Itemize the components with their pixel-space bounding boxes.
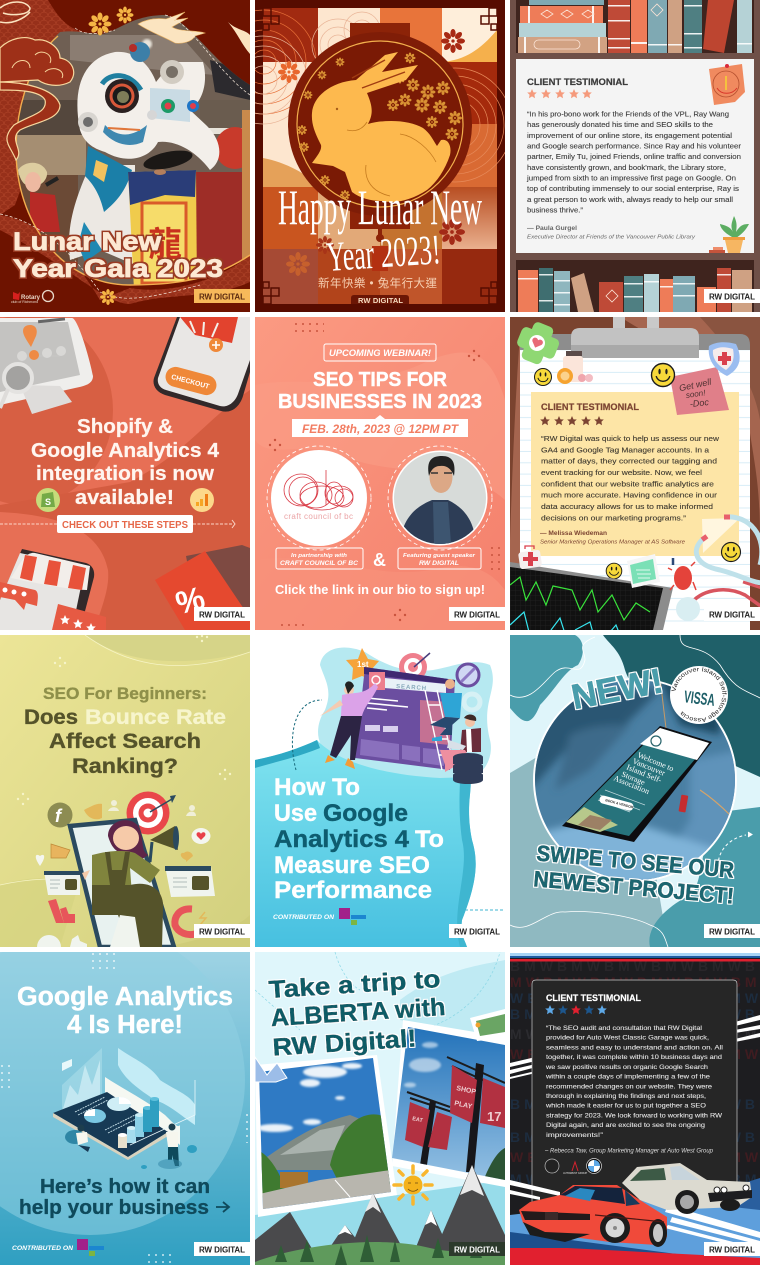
woman with camera bbox=[18, 163, 60, 232]
photo: Canmore main street bbox=[255, 1055, 397, 1217]
woman with megaphone bbox=[82, 820, 179, 947]
panel: Happy Lunar New Year bbox=[255, 0, 505, 312]
icon: small mountains bbox=[255, 1057, 287, 1082]
heading: Affect Search bbox=[49, 730, 201, 753]
quote bbox=[545, 1025, 724, 1139]
heading: Take a trip to bbox=[268, 966, 441, 1004]
heading bbox=[17, 983, 233, 1039]
icons: flowers bbox=[278, 29, 465, 276]
tag: upcoming webinar: UPCOMING WEBINAR! bbox=[329, 348, 431, 359]
paper corner bbox=[702, 518, 740, 553]
call to action bbox=[0, 515, 235, 533]
heading: new: NEW! bbox=[568, 661, 666, 717]
attribution bbox=[527, 226, 696, 240]
badge: RW DIGITAL bbox=[199, 1246, 245, 1254]
partner circle: craft council bbox=[267, 446, 371, 550]
attribution: – Rebecca Taw, Group Marketing Manager at Auto West Group bbox=[544, 1148, 714, 1154]
decorative dots bbox=[0, 952, 250, 1265]
photo: street banners: 17 bbox=[487, 1109, 501, 1124]
dashed arrow bbox=[292, 700, 322, 770]
quote: has generously donated his time and SEO skills to the bbox=[527, 120, 713, 129]
sticky note: -Doc bbox=[689, 397, 710, 409]
icon: plant bbox=[709, 216, 749, 253]
icon: target bbox=[126, 792, 176, 834]
testimonial card: CLIENT TESTIMONIAL bbox=[527, 77, 628, 88]
badge bbox=[449, 1242, 505, 1256]
magnet bbox=[175, 909, 195, 935]
quote: partner, Emily Tu, joined Friends, online traffic and conversion bbox=[527, 152, 741, 161]
illustration: percent cards: % bbox=[172, 579, 209, 621]
lion head bbox=[77, 52, 219, 170]
icon: first place star: 1st bbox=[357, 660, 369, 669]
illustration: monitor and magnifier bbox=[0, 317, 93, 414]
phone text bbox=[612, 751, 675, 796]
cloud ornament bbox=[0, 38, 74, 160]
contributed on: CONTRIBUTED ON bbox=[12, 1245, 73, 1252]
heading: Google bbox=[323, 800, 408, 827]
badge bbox=[194, 924, 250, 938]
quote: confident that our website traffic analytics are bbox=[541, 479, 714, 488]
panel: new project VISSA bbox=[510, 635, 760, 947]
panel: Shopify and Google Analytics 4 bbox=[0, 315, 250, 632]
Chinese greeting: 新年快樂 • 兔年行大運 bbox=[318, 276, 438, 290]
shelf frame bbox=[510, 53, 760, 260]
icon: stethoscope bbox=[676, 517, 760, 621]
badge: RW DIGITAL bbox=[709, 292, 755, 302]
badge bbox=[449, 607, 505, 621]
heading: Bounce Rate bbox=[85, 706, 226, 729]
contributed on: CONTRIBUTED ON bbox=[273, 914, 334, 921]
marketing illustration bbox=[36, 792, 215, 959]
icon: first aid kit bbox=[518, 546, 542, 569]
road stripes bbox=[510, 1178, 760, 1265]
heading: SEO For Beginners: bbox=[43, 684, 207, 703]
title: Lunar New bbox=[13, 228, 162, 256]
quote: jumped from sixth to an impressive first page on Google. On bbox=[526, 174, 736, 182]
pine trees bbox=[275, 1235, 482, 1265]
quote: decisions on our marketing programs.” bbox=[541, 513, 687, 522]
badge: RW DIGITAL bbox=[199, 610, 245, 620]
rabbit medallion bbox=[288, 32, 472, 216]
heading: To bbox=[415, 826, 444, 853]
heading bbox=[274, 774, 444, 904]
side stripes bbox=[510, 1015, 760, 1079]
sign up line: Click the link in our bio to sign up! bbox=[275, 583, 485, 597]
quote bbox=[526, 110, 742, 214]
quote: matter of days, they corrected our tagging and bbox=[541, 457, 717, 466]
speech heart bbox=[192, 828, 210, 844]
quote: GA4 and Google Tag Manager accounts. In a bbox=[541, 445, 710, 454]
tag: upcoming webinar bbox=[324, 344, 436, 361]
icon: medicine jar bbox=[557, 351, 593, 384]
panel: SEO for beginners bbox=[0, 635, 250, 959]
heading bbox=[24, 684, 226, 778]
panel: Lunar New Year Gala 2023 bbox=[0, 0, 255, 312]
heading: swipe: SWIPE TO SEE OUR bbox=[536, 840, 735, 883]
man on ladder bbox=[430, 679, 462, 741]
label: in partnership: CRAFT COUNCIL OF BC bbox=[280, 560, 358, 567]
quote: strategy for 2023. We look forward to working with RW bbox=[546, 1112, 723, 1119]
quote: top of contributing immensely to our social enterprise, Ray is bbox=[527, 184, 739, 193]
title: BUSINESSES IN 2023 bbox=[278, 390, 482, 413]
badge bbox=[351, 295, 409, 305]
BMW pattern bbox=[510, 958, 760, 1187]
search illustration: SEARCH bbox=[396, 684, 426, 692]
call to action: CHECK OUT THESE STEPS bbox=[62, 520, 188, 531]
red sports car bbox=[519, 1185, 667, 1247]
contributed on bbox=[12, 1239, 104, 1256]
badge bbox=[449, 924, 505, 938]
sticky note: soon! bbox=[685, 388, 707, 400]
man with laptop bbox=[440, 714, 481, 772]
lantern bbox=[350, 23, 410, 271]
ladder bbox=[425, 690, 455, 772]
badge: RW DIGITAL bbox=[454, 1246, 500, 1254]
badge: VISSA: VISSA bbox=[683, 687, 716, 710]
bars bbox=[118, 1097, 159, 1148]
phone text: Vancouver bbox=[631, 757, 667, 778]
attribution: Executive Director at Friends of the Vancouver Public Library bbox=[527, 234, 696, 240]
quote: thorough in explaining the findings and next steps, bbox=[546, 1093, 706, 1100]
heading: Google Analytics bbox=[17, 983, 233, 1011]
icon: map bbox=[470, 1009, 505, 1041]
quote: much more accurate. Having confidence in our bbox=[541, 491, 718, 500]
icon: target bbox=[399, 653, 430, 681]
attribution: — Paula Gurgel bbox=[527, 225, 577, 232]
monitor with heart trace bbox=[510, 562, 673, 640]
quote: provided for Auto West Classic Garage was quick, bbox=[546, 1035, 709, 1042]
illustration blob bbox=[318, 648, 493, 781]
date: FEB. 28th, 2023 @ 12PM PT bbox=[302, 422, 460, 436]
quote: improvement of our online store, its engagement potential bbox=[527, 131, 732, 140]
logo: Rotary club: Rotary bbox=[21, 295, 41, 301]
illustration: checkout phone bbox=[153, 317, 250, 412]
logo: Rotary club bbox=[11, 290, 54, 304]
contributed on bbox=[273, 908, 366, 925]
decorative dots bbox=[17, 635, 231, 805]
greeting script bbox=[278, 192, 482, 271]
browser cards bbox=[44, 871, 80, 895]
panel: Google Analytics 4 is here bbox=[0, 925, 250, 1265]
client logos bbox=[545, 1158, 602, 1175]
icon: shield bbox=[709, 342, 740, 376]
quote: together, it was complete within 10 business days and bbox=[546, 1054, 722, 1061]
woman bbox=[320, 681, 378, 769]
panel: trip to Alberta bbox=[255, 952, 510, 1265]
badge: RW DIGITAL bbox=[709, 1246, 755, 1254]
icon: green cross bbox=[512, 317, 564, 369]
photo: denim jacket with phone bbox=[530, 675, 740, 885]
quote: recommended changes on our website. They were bbox=[546, 1083, 712, 1090]
icon: sun bbox=[394, 1166, 432, 1204]
icons: gold flowers bbox=[88, 6, 134, 305]
logo: Rotary club: club of Richmond bbox=[11, 300, 38, 304]
testimonial card bbox=[516, 59, 754, 253]
heading bbox=[268, 966, 446, 1062]
heading: swipe bbox=[533, 840, 735, 909]
badge bbox=[194, 289, 250, 303]
icon: Shopify bbox=[36, 488, 60, 512]
title: SEO TIPS FOR bbox=[313, 368, 447, 391]
quote: data accuracy allows for us to make informed bbox=[541, 502, 713, 511]
quote: which made it easier for us to put together a SEO bbox=[545, 1103, 706, 1110]
badge: RW DIGITAL bbox=[709, 928, 755, 936]
quote: “In his pro-bono work for the Friends of the VPL, Ray Wang bbox=[527, 110, 729, 118]
phone text: Storage bbox=[620, 770, 647, 787]
badge: RW DIGITAL bbox=[358, 296, 403, 305]
icon: Shopify: S bbox=[45, 497, 51, 507]
heading bbox=[31, 416, 220, 509]
quote: event tracking for our website. Now, we feel bbox=[541, 468, 702, 477]
icon: first place star bbox=[346, 648, 379, 680]
quote: we saw positive results on organic Google Search bbox=[545, 1064, 708, 1071]
top stripes bbox=[510, 952, 760, 962]
greeting script: Year 2023! bbox=[325, 227, 442, 281]
banner character: 龍 bbox=[148, 226, 182, 264]
quote: within a couple days of implementing a few of the bbox=[545, 1074, 710, 1081]
title bbox=[278, 368, 482, 413]
badge bbox=[704, 924, 760, 938]
phone text: Island Self- bbox=[625, 763, 663, 785]
label: guest speaker bbox=[398, 548, 481, 569]
photo: street banners: PLAY bbox=[454, 1100, 473, 1111]
heading: Use bbox=[274, 800, 317, 827]
heading: available! bbox=[75, 487, 174, 509]
quote: business thrive.” bbox=[527, 206, 584, 214]
badge: RW DIGITAL bbox=[199, 928, 245, 936]
panel: SEO tips webinar bbox=[255, 317, 505, 630]
subheading: Here’s how it can bbox=[40, 1175, 210, 1198]
heading: Does bbox=[24, 706, 78, 729]
icon: magnifier bbox=[457, 664, 479, 686]
icon: anatomical heart bbox=[668, 558, 696, 590]
panel: client testimonial, clipboard bbox=[510, 317, 760, 640]
photo: street banners: EAT bbox=[412, 1116, 424, 1124]
speaker photo bbox=[388, 446, 492, 550]
icon: gear bbox=[464, 694, 480, 710]
testimonial card: CLIENT TESTIMONIAL bbox=[546, 993, 641, 1004]
attribution bbox=[540, 530, 686, 546]
testimonial card bbox=[532, 980, 737, 1205]
subheading: help your business bbox=[19, 1196, 209, 1219]
quote bbox=[541, 434, 720, 522]
badge: RW DIGITAL bbox=[709, 610, 755, 620]
heading: Measure SEO bbox=[274, 852, 430, 879]
panel: How to use Google Analytics 4 bbox=[255, 635, 505, 947]
badge bbox=[194, 1242, 250, 1256]
quote: “RW Digital was quick to help us assess our new bbox=[541, 434, 720, 443]
icon: rabbit bbox=[138, 12, 205, 43]
analyst left bbox=[65, 1124, 90, 1152]
heading: 4 Is Here! bbox=[67, 1011, 183, 1039]
star rating bbox=[540, 416, 604, 425]
quote: a great person to work with, always ready to help our small bbox=[527, 195, 733, 204]
ampersand: & bbox=[373, 550, 386, 570]
testimonial card: CLIENT TESTIMONIAL bbox=[541, 402, 639, 413]
photo: street banners bbox=[390, 1020, 510, 1190]
quote: seamless and easy to understand and action on. All bbox=[546, 1044, 724, 1051]
illustration: shop phone bbox=[0, 549, 106, 632]
quote: improvements!” bbox=[546, 1132, 604, 1139]
panel: client testimonial, bookshelf bbox=[510, 0, 760, 312]
photo: street banners: SHOP bbox=[456, 1085, 477, 1096]
label: guest speaker: Featuring guest speaker bbox=[403, 553, 476, 559]
illustration: percent cards bbox=[155, 545, 250, 630]
partner circle: craft council: craft council of bc bbox=[284, 512, 353, 521]
bar icon bbox=[48, 899, 75, 923]
testimonial card bbox=[531, 392, 739, 556]
heading: Shopify & bbox=[77, 416, 173, 438]
title bbox=[12, 230, 224, 279]
panel: client testimonial, classic cars bbox=[510, 952, 760, 1265]
photo: lion dance bbox=[16, 15, 250, 284]
badge: RW DIGITAL bbox=[454, 610, 500, 620]
date bbox=[292, 415, 468, 437]
badge bbox=[704, 289, 760, 303]
badge: RW DIGITAL bbox=[199, 292, 245, 302]
badge: RW DIGITAL bbox=[454, 928, 500, 936]
heading: RW Digital! bbox=[272, 1025, 417, 1062]
wave background bbox=[255, 740, 476, 947]
phone mockup: BOOK A VENDOR bbox=[605, 798, 634, 810]
heading: Performance bbox=[274, 877, 432, 904]
arrow bbox=[216, 1202, 229, 1212]
label: guest speaker: RW DIGITAL bbox=[419, 560, 459, 567]
phone text: Welcome to bbox=[636, 751, 675, 773]
lion body bbox=[69, 165, 135, 265]
heading: Ranking? bbox=[72, 755, 178, 778]
label: in partnership bbox=[276, 548, 363, 569]
dashed arrow bbox=[718, 832, 752, 866]
badge: VISSA bbox=[670, 666, 728, 724]
phone text: Association bbox=[612, 774, 651, 796]
attribution: — Melissa Wiedeman bbox=[540, 530, 607, 537]
phone frame bbox=[70, 820, 174, 947]
client logos: AUTOWEST GROUP bbox=[563, 1172, 587, 1175]
top shelf books bbox=[518, 0, 752, 53]
heading: Analytics 4 bbox=[274, 826, 409, 853]
badge bbox=[194, 607, 250, 621]
icon: facebook: f bbox=[55, 806, 63, 826]
badge bbox=[704, 1242, 760, 1256]
attribution: Senior Marketing Operations Manager at AS Software bbox=[540, 540, 686, 546]
icon: sticky note logo bbox=[709, 64, 745, 105]
white classic car bbox=[622, 1163, 752, 1214]
badge: VISSA: Vancouver Island Self-Storage Association bbox=[671, 667, 727, 722]
bottom shelf books bbox=[518, 268, 752, 312]
label: in partnership: In partnership with bbox=[291, 553, 348, 559]
icons: smileys bbox=[534, 364, 740, 579]
search illustration bbox=[320, 648, 483, 784]
heading: swipe: NEWEST PROJECT! bbox=[533, 866, 735, 909]
icon: Google Analytics bbox=[190, 488, 214, 512]
greeting script: Happy Lunar New bbox=[278, 179, 482, 235]
clipboard bbox=[520, 317, 750, 630]
title: Year Gala 2023 bbox=[13, 255, 223, 283]
quote: have consistently grown, and book'mark, the Library store, bbox=[527, 163, 726, 172]
star rating bbox=[545, 1005, 607, 1014]
heading: How To bbox=[274, 774, 360, 801]
subheading bbox=[19, 1175, 210, 1219]
heading: ALBERTA with bbox=[270, 994, 446, 1032]
sticky note bbox=[670, 367, 729, 415]
heading: integration is now bbox=[36, 463, 214, 485]
mountains bbox=[255, 1165, 505, 1265]
star rating bbox=[527, 89, 592, 98]
browser window bbox=[355, 667, 455, 770]
analyst right bbox=[158, 1124, 182, 1169]
sticky note: Get well bbox=[678, 376, 713, 393]
server stack bbox=[453, 753, 483, 784]
phone mockup bbox=[562, 726, 712, 842]
decorative dots bbox=[269, 318, 505, 630]
icon: x-ray bbox=[627, 554, 660, 588]
quote: “The SEO audit and consultation that RW Digital bbox=[546, 1025, 703, 1032]
icon: facebook bbox=[48, 802, 72, 828]
quote: and Google search performance. Since Ray and his volunteer bbox=[527, 142, 742, 150]
badge bbox=[704, 607, 760, 621]
isometric analytics illustration bbox=[53, 1048, 197, 1169]
heading: Google Analytics 4 bbox=[31, 440, 220, 462]
quote: Digital again, and are excited to see the ongoing bbox=[546, 1122, 705, 1129]
illustration: checkout phone: CHECKOUT bbox=[170, 374, 211, 391]
